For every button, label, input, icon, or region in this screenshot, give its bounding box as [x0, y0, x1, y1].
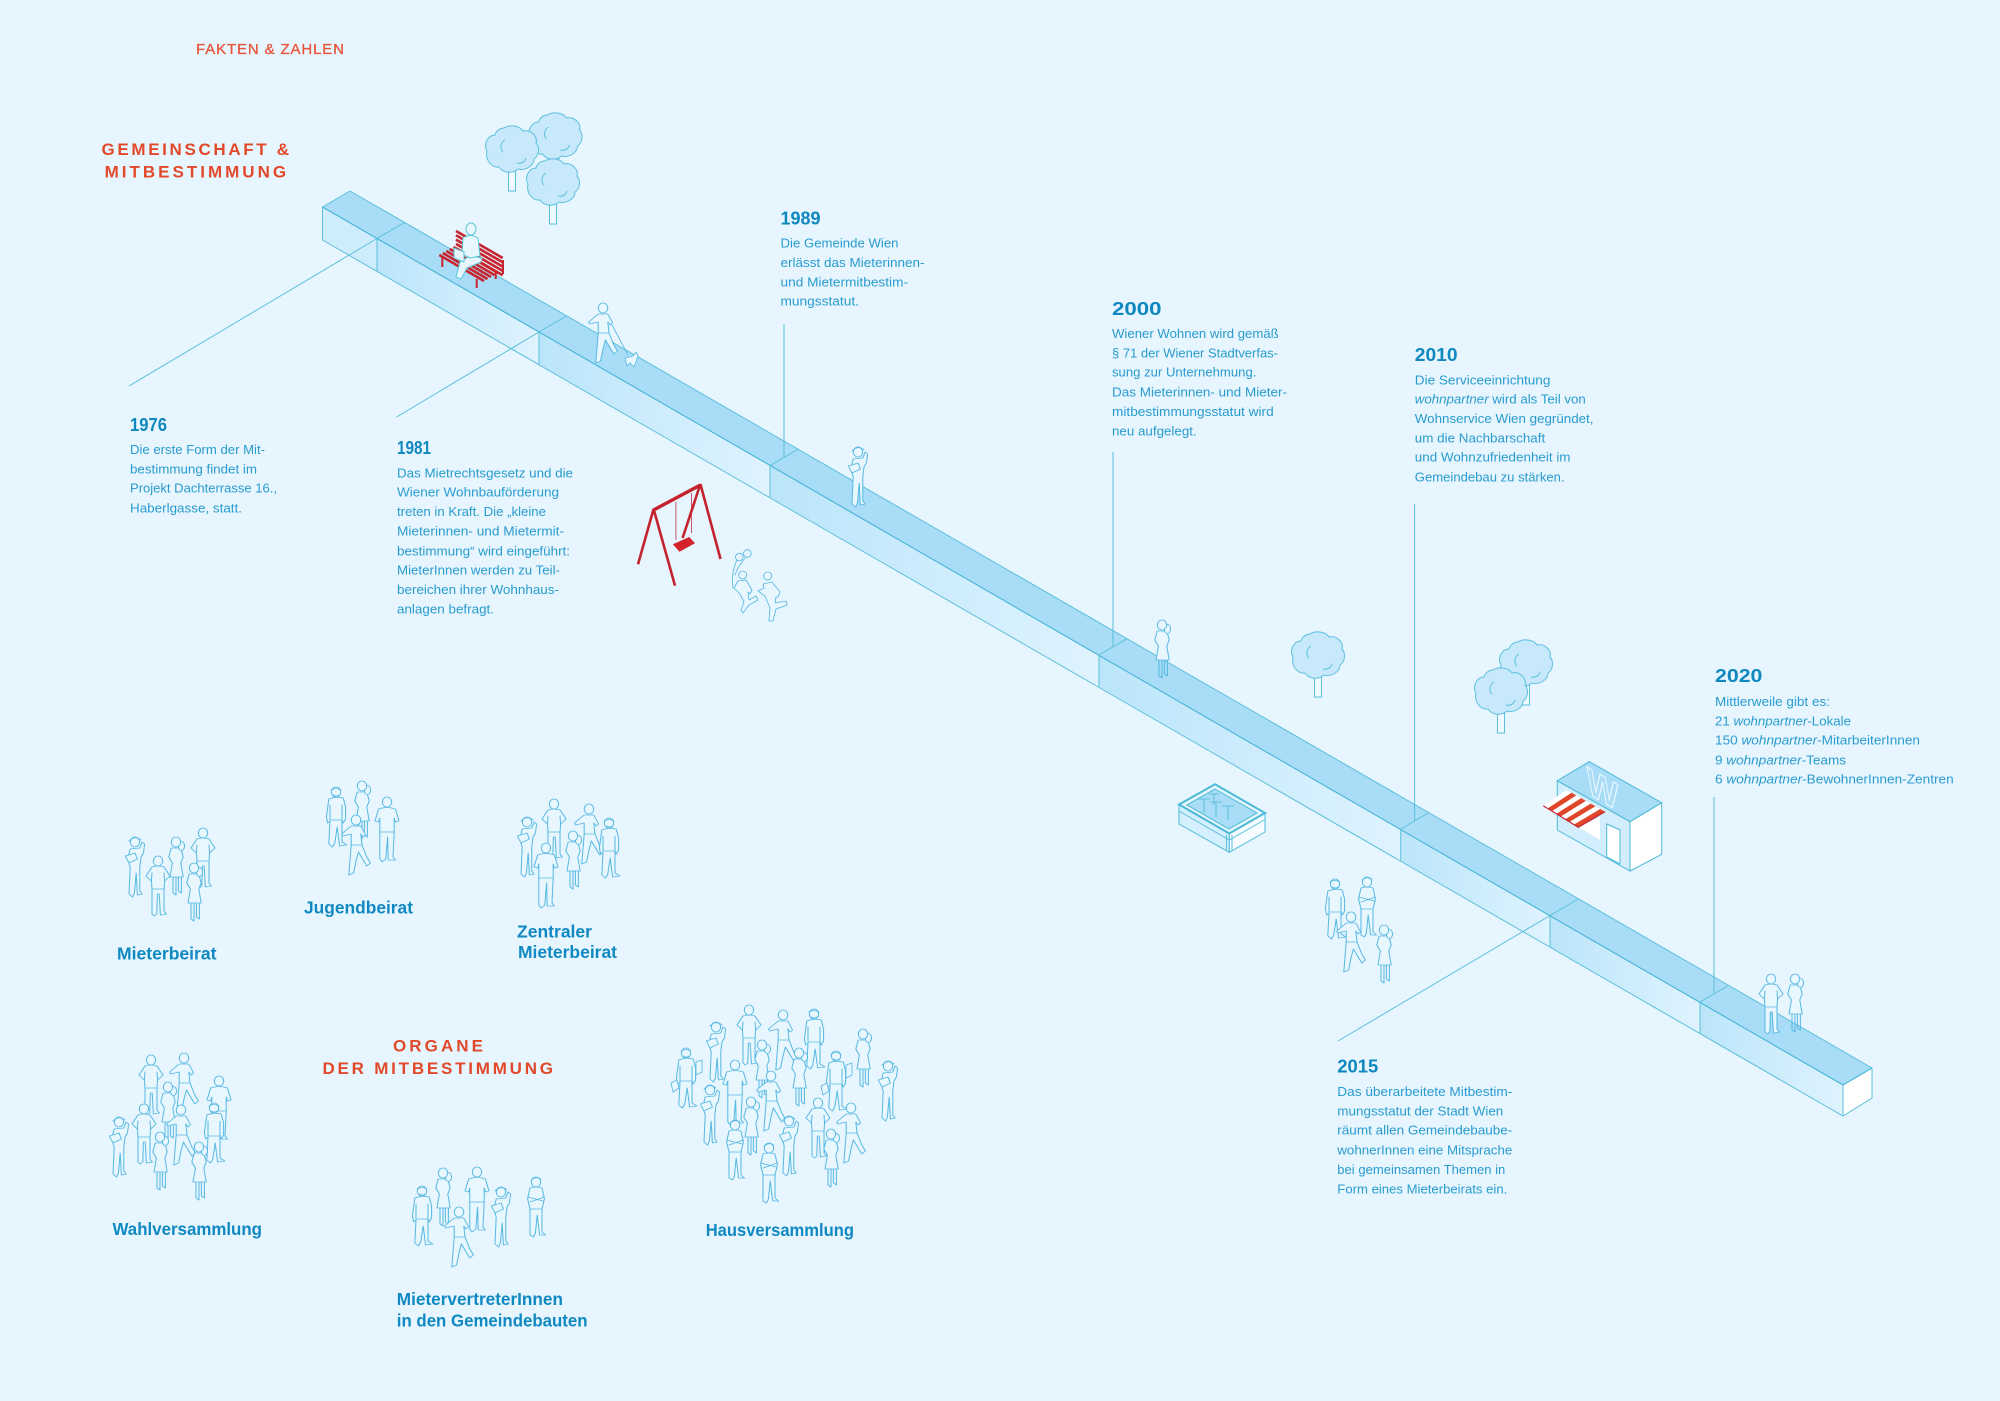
text block 1981: MieterInnen werden zu Teil-	[397, 563, 560, 578]
icon: red bench with seated person	[439, 223, 503, 288]
text block 1981: Mieterinnen- und Mietermit-	[397, 523, 564, 538]
icon: red swing	[638, 484, 720, 586]
text block 2000: neu aufgelegt.	[1112, 423, 1197, 438]
text block 1981: 1981	[397, 438, 431, 458]
text block 1981: Das Mietrechtsgesetz und die	[397, 465, 573, 480]
text block 1976: Projekt Dachterrasse 16.,	[130, 481, 277, 496]
people: MietervertreterInnen	[412, 1167, 546, 1267]
text block 2010: 2010	[1415, 345, 1458, 365]
text block 2010: Die Serviceeinrichtung	[1415, 372, 1550, 387]
label: Zentraler Mieterbeirat: Mieterbeirat	[518, 942, 617, 962]
text block 1989: 1989	[780, 208, 820, 228]
text block 2000: mitbestimmungsstatut wird	[1112, 404, 1274, 419]
text block 2010	[1415, 345, 1594, 484]
label: Jugendbeirat: Jugendbeirat	[304, 897, 413, 917]
section label: Fakten & Zahlen: FAKTEN & ZAHLEN	[196, 41, 344, 58]
text block 2010: Wohnservice Wien gegründet,	[1415, 411, 1594, 426]
label: Wahlversammlung: Wahlversammlung	[112, 1219, 262, 1239]
icon: raised bed	[1179, 784, 1265, 852]
text block 2015: bei gemeinsamen Themen in	[1337, 1162, 1505, 1177]
timeline beam	[322, 191, 1872, 1116]
title	[102, 140, 289, 182]
people: Mieterbeirat	[125, 828, 215, 921]
label: MietervertreterInnen in den Gemeindebauten: in den Gemeindebauten	[397, 1311, 588, 1331]
icon: wohnpartner kiosk	[1543, 760, 1662, 871]
text block 1976: Haberlgasse, statt.	[130, 501, 242, 516]
text block 2000	[1112, 299, 1287, 438]
label: MietervertreterInnen in den Gemeindebauten	[397, 1289, 588, 1331]
heading: Organe der Mitbestimmung: DER MITBESTIMMUNG	[322, 1059, 553, 1078]
text block 2010: wohnpartner wird als Teil von	[1415, 392, 1586, 407]
text block 2015: 2015	[1337, 1056, 1378, 1076]
text block 2000: § 71 der Wiener Stadtverfas-	[1112, 345, 1278, 360]
text block 2020: 9 wohnpartner-Teams	[1715, 752, 1846, 767]
beam top face	[322, 191, 1872, 1085]
leader lines	[129, 238, 1714, 1041]
text block 2010: Gemeindebau zu stärken.	[1415, 469, 1565, 484]
text block 2000: Wiener Wohnen wird gemäß	[1112, 326, 1279, 341]
text block 2020: Mittlerweile gibt es:	[1715, 694, 1830, 709]
icon: woman walking dog	[589, 303, 638, 367]
text block 2000: sung zur Unternehmung.	[1112, 365, 1256, 380]
heading: Organe der Mitbestimmung	[322, 1037, 553, 1078]
text block 2020: 21 wohnpartner-Lokale	[1715, 713, 1851, 728]
text block 1981: treten in Kraft. Die „kleine	[397, 504, 546, 519]
text block 2010: und Wohnzufriedenheit im	[1415, 450, 1570, 465]
people: Wahlversammlung	[109, 1053, 231, 1200]
icon: wohnpartner kiosk: W	[1587, 760, 1618, 820]
text block 1981: Wiener Wohnbauförderung	[397, 485, 559, 500]
text block 1981: bereichen ihrer Wohnhaus-	[397, 582, 559, 597]
text block 1981	[397, 438, 573, 616]
trees top left	[486, 113, 582, 224]
label: Hausversammlung: Hausversammlung	[706, 1220, 854, 1240]
tree between 2000 and 2010	[1292, 632, 1344, 697]
text block 2015: Form eines Mieterbeirats ein.	[1337, 1181, 1507, 1196]
tree pair	[1475, 640, 1552, 733]
text block 1981: bestimmung“ wird eingeführt:	[397, 543, 570, 558]
text block 2020: 150 wohnpartner-MitarbeiterInnen	[1715, 733, 1920, 748]
label: Zentraler Mieterbeirat: Zentraler	[517, 921, 592, 941]
text block 1989: mungsstatut.	[780, 294, 859, 309]
text block 2000: Das Mieterinnen- und Mieter-	[1112, 384, 1287, 399]
text block 1976: Die erste Form der Mit-	[130, 442, 265, 457]
icon: person 2000	[1155, 620, 1171, 678]
people: Hausversammlung	[671, 1005, 898, 1203]
text block 1989: erlässt das Mieterinnen-	[780, 255, 924, 270]
label: Mieterbeirat: Mieterbeirat	[117, 943, 217, 963]
group: 2015 people	[1325, 877, 1393, 983]
text block 2015: Das überarbeitete Mitbestim-	[1337, 1084, 1512, 1099]
text block 2020	[1715, 666, 1954, 787]
text block 1976: bestimmung findet im	[130, 461, 257, 476]
group: 2020 people	[1759, 974, 1804, 1034]
icon: children with balloons	[732, 550, 787, 621]
text block 1976: 1976	[130, 415, 167, 435]
awning	[1543, 790, 1605, 827]
text block 2015: wohnerInnen eine Mitsprache	[1336, 1142, 1512, 1157]
title: GEMEINSCHAFT &	[102, 140, 289, 159]
heading: Organe der Mitbestimmung: ORGANE	[393, 1037, 483, 1056]
text block 2015	[1336, 1056, 1512, 1196]
text block 1976	[130, 415, 277, 516]
text block 2000: 2000	[1112, 299, 1162, 319]
text block 2020: 2020	[1715, 666, 1762, 686]
label: Zentraler Mieterbeirat	[517, 921, 617, 962]
text block 1989: Die Gemeinde Wien	[780, 236, 898, 251]
text block 2020: 6 wohnpartner-BewohnerInnen-Zentren	[1715, 772, 1954, 787]
title: MITBESTIMMUNG	[105, 163, 286, 182]
icon: person 1989	[848, 447, 868, 507]
label: MietervertreterInnen in den Gemeindebauten: MietervertreterInnen	[397, 1289, 563, 1309]
text block 2015: mungsstatut der Stadt Wien	[1337, 1103, 1503, 1118]
beam side segments	[322, 207, 1843, 1116]
text block 1981: anlagen befragt.	[397, 601, 494, 616]
beam end cap	[1843, 1068, 1872, 1116]
people: Zentraler Mieterbeirat	[517, 799, 620, 908]
text block 1989: und Mietermitbestim-	[780, 274, 908, 289]
text block 2015: räumt allen Gemeindebaube-	[1337, 1123, 1512, 1138]
text block 1989	[780, 208, 924, 309]
people: Jugendbeirat	[326, 781, 399, 875]
text block 2010: um die Nachbarschaft	[1415, 430, 1546, 445]
